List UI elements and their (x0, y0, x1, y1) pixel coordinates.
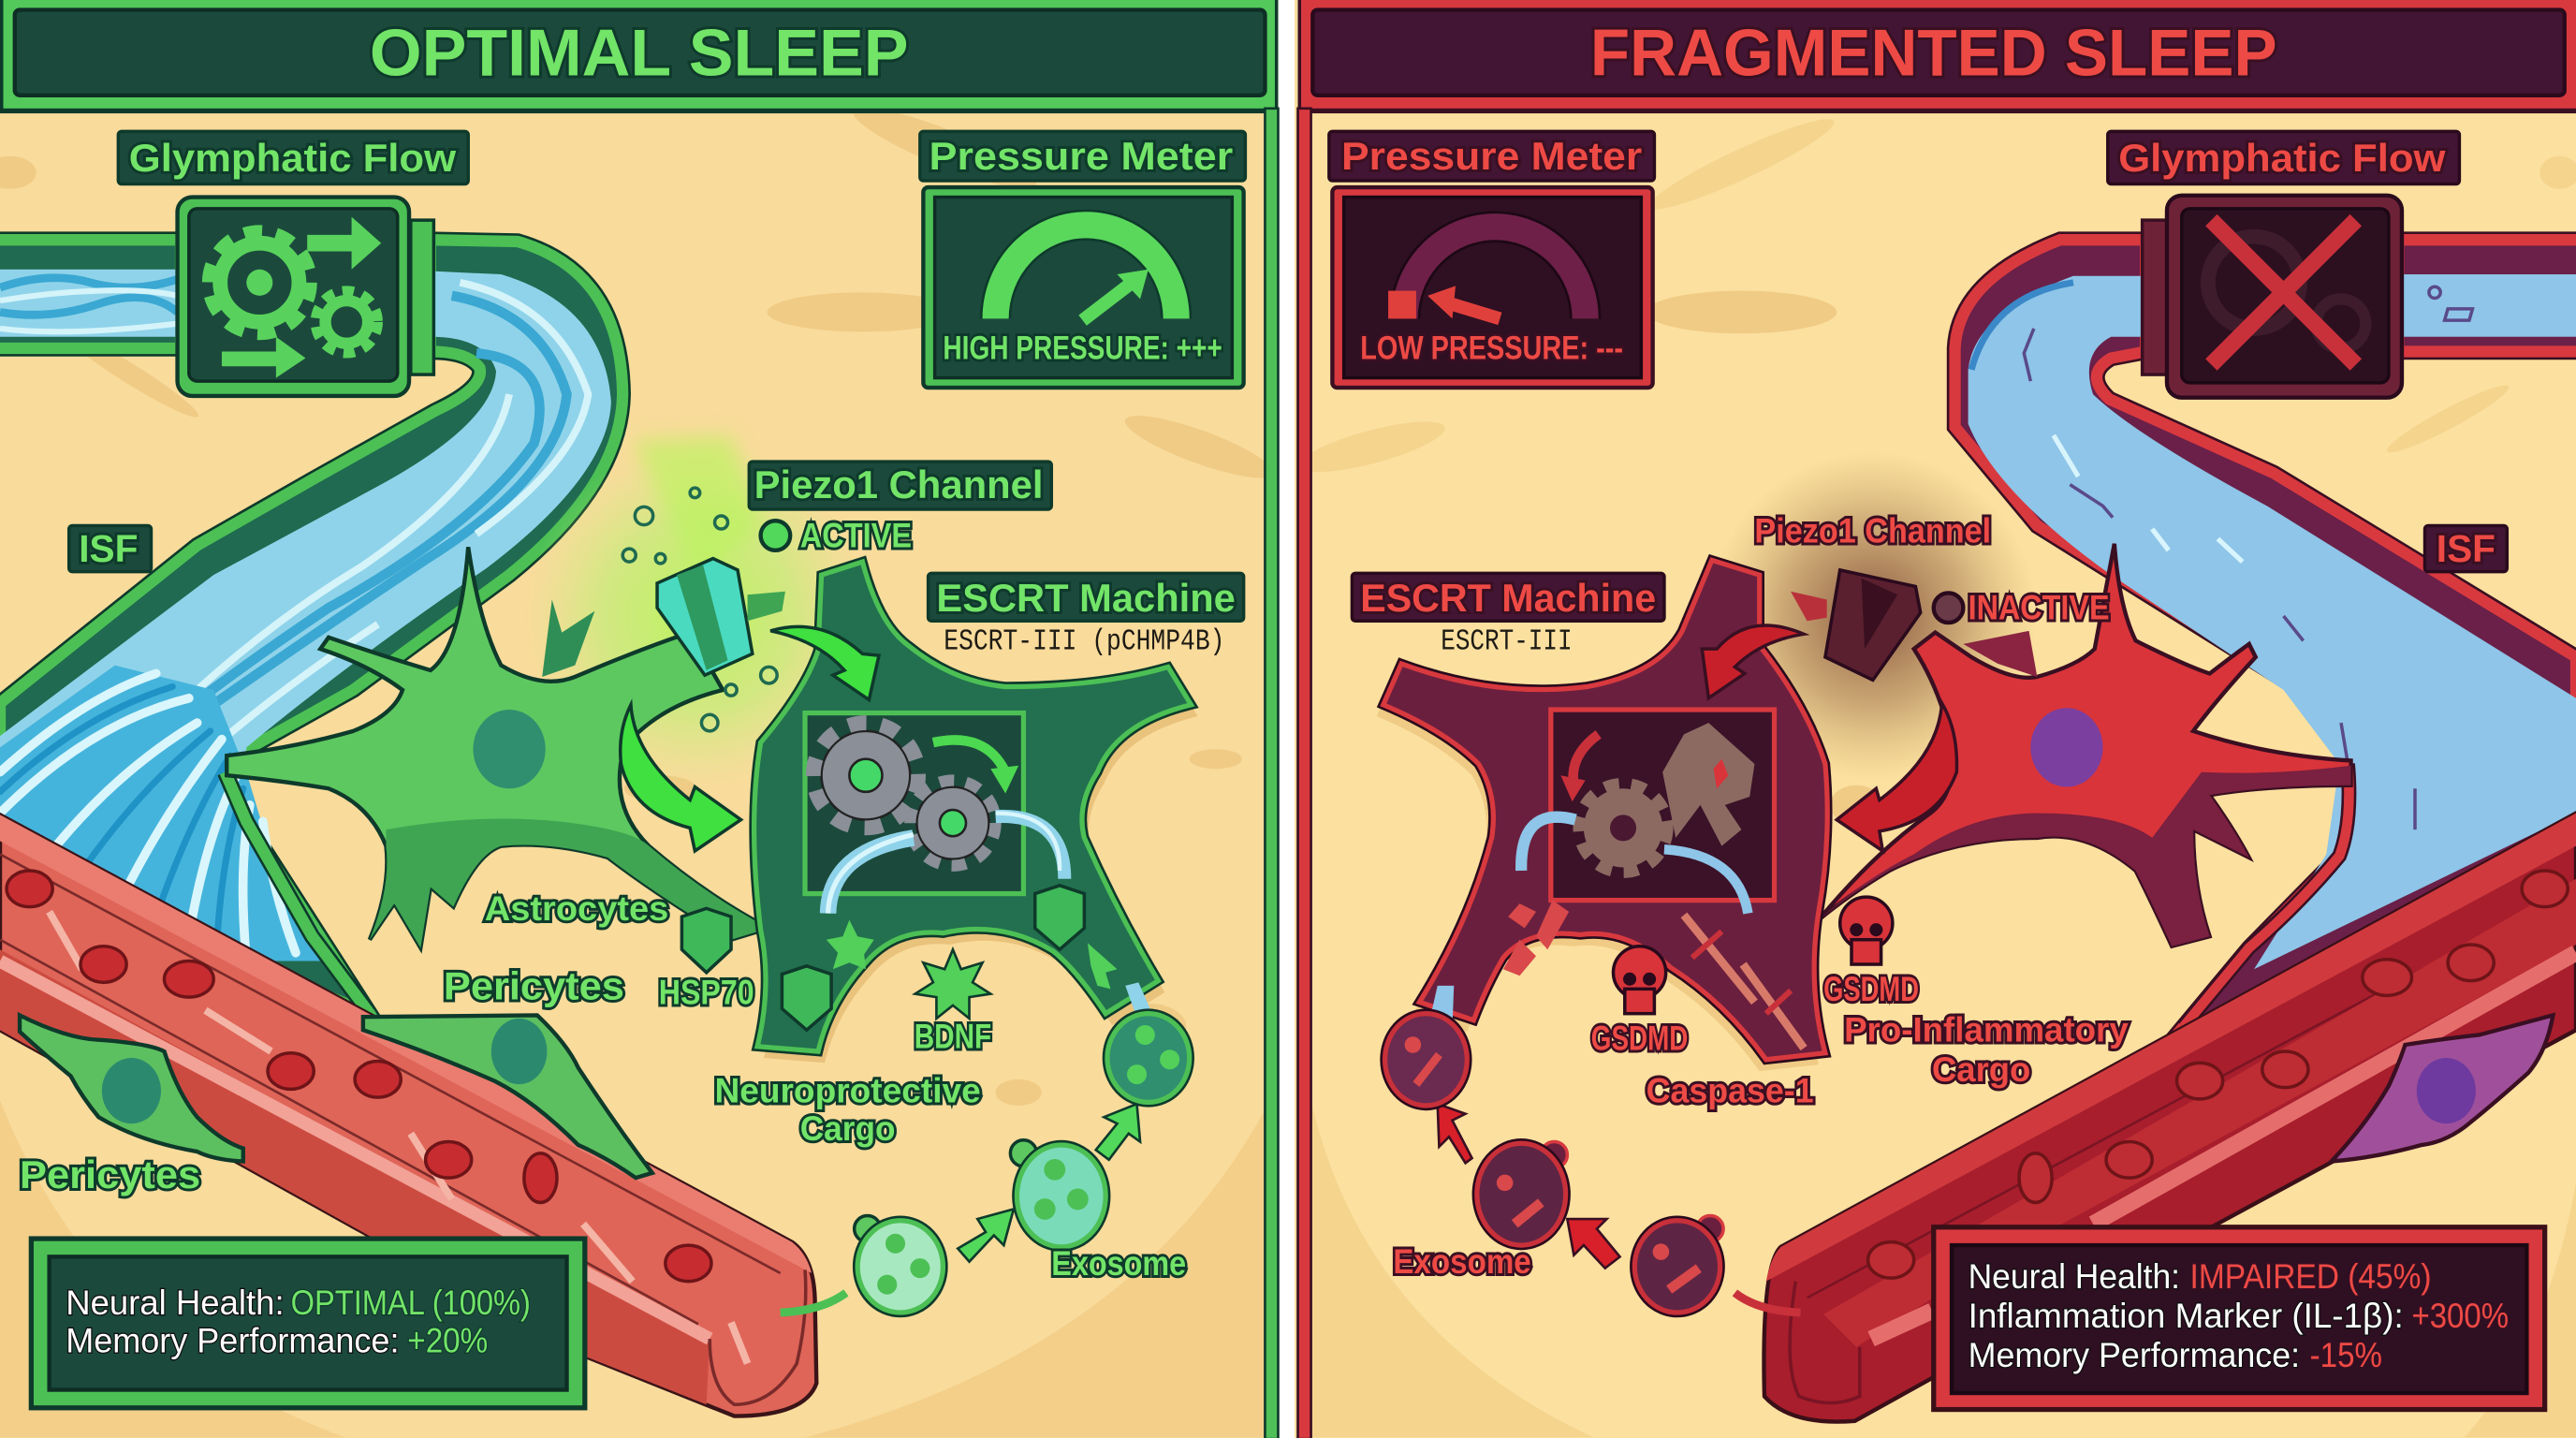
ESCRT cell with gears (681, 562, 1197, 1063)
label: glymphatic flow: Glymphatic Flow (2118, 136, 2446, 180)
label: neuroprotective cargo: Neuroprotective (714, 1072, 981, 1110)
label: BDNF: BDNF (915, 1018, 991, 1056)
stats box: optimal: Neural Health: (66, 1284, 285, 1322)
ESCRT cell with broken gears (1377, 560, 1827, 1071)
label: ISF (2425, 526, 2507, 572)
stats box: fragmented: +300% (2411, 1297, 2509, 1335)
arrow (958, 1209, 1014, 1262)
label: pericytes lower: Pericytes (20, 1152, 200, 1196)
label: GSDMD left: GSDMD (1591, 1019, 1688, 1057)
status: active: ACTIVE (800, 517, 912, 555)
stats box: fragmented: Memory Performance: (1969, 1336, 2300, 1374)
text: ESCRT-III: ESCRT-III (1441, 626, 1573, 659)
curved arrow: piezo to ESCRT (770, 626, 879, 700)
status: inactive: INACTIVE (1969, 589, 2110, 627)
label: GSDMD right: GSDMD (1823, 970, 1919, 1008)
label: caspase-1: Caspase-1 (1647, 1072, 1814, 1110)
red blood cells (1868, 871, 2568, 1278)
header: fragmented sleep (1298, 0, 2576, 113)
exosome 3 (1107, 982, 1190, 1102)
panel: optimal sleep (0, 0, 1279, 1438)
arrow (1438, 1104, 1472, 1163)
pressure gauge: low: LOW PRESSURE: --- (1360, 330, 1623, 366)
label: piezo1 channel: Piezo1 Channel (1754, 511, 1991, 550)
curved arrow: astrocyte to ESCRT (1837, 703, 1956, 851)
stats box: optimal: OPTIMAL (100%) (291, 1284, 531, 1322)
stats box: fragmented: -15% (2310, 1336, 2382, 1374)
stats box: fragmented: Inflammation Marker (IL-1β): (1969, 1297, 2404, 1335)
pericyte: upper (363, 1015, 652, 1178)
header: fragmented sleep: FRAGMENTED SLEEP (1590, 16, 2277, 90)
panel background (1295, 0, 2576, 1438)
gear window (805, 713, 1023, 894)
astrocyte (227, 547, 768, 947)
exosome connector (781, 1293, 846, 1313)
leaking water (1521, 817, 1748, 914)
stats box: fragmented (1934, 1227, 2545, 1410)
label: glymphatic flow: Glymphatic Flow (129, 136, 456, 180)
piezo glow (526, 435, 871, 788)
label: astrocytes: Astrocytes (485, 889, 668, 928)
red blood cells (7, 871, 711, 1282)
broken gear window (1551, 710, 1775, 901)
label: neuroprotective cargo (714, 1072, 981, 1148)
blood vessel with red cells (0, 814, 816, 1416)
curved arrow: astrocyte to ESCRT (621, 705, 741, 851)
label: pro-inflammatory cargo: Pro-Inflammatory (1844, 1011, 2129, 1049)
exosome 1 (855, 1215, 943, 1313)
exosome chain (855, 982, 1190, 1313)
label: exosome: Exosome (1051, 1244, 1186, 1283)
stats box: fragmented: Neural Health: (1969, 1257, 2180, 1296)
label: ISF (69, 526, 151, 572)
arrow (1096, 1104, 1140, 1160)
piezo1 channel: active (622, 488, 785, 731)
label: ESCRT machine: ESCRT Machine (936, 576, 1236, 620)
exosome chain (1385, 986, 1723, 1313)
blood vessel with red cells (1764, 814, 2576, 1422)
label: pericytes upper: Pericytes (444, 963, 624, 1007)
neuroprotective cargo icons (681, 886, 1117, 1030)
water through gears (828, 814, 1064, 914)
header: optimal sleep: OPTIMAL SLEEP (370, 16, 909, 90)
dark glow around inactive piezo (1708, 452, 2037, 780)
label: ISF: ISF (79, 527, 138, 570)
exosome 2 (1477, 1142, 1567, 1245)
pressure gauge: high: HIGH PRESSURE: +++ (943, 330, 1222, 366)
glymphatic flow gearbox icon (178, 198, 433, 396)
caspase swords and debris (1503, 901, 1804, 1049)
pericyte: lower (20, 1015, 243, 1162)
label: pressure meter: Pressure Meter (1341, 134, 1642, 178)
pressure gauge: low (1332, 187, 1653, 388)
arrow (1567, 1219, 1620, 1269)
pressure gauge: high (923, 187, 1244, 388)
panel border (1265, 109, 1278, 1438)
stats box: optimal (31, 1239, 585, 1408)
panel background (0, 0, 1279, 1438)
skull: GSDMD right (1840, 897, 1893, 964)
glymphatic pipe with ISF water (1955, 240, 2576, 1027)
exosome 2 (1010, 1140, 1105, 1247)
label: piezo1 channel: Piezo1 Channel (754, 462, 1043, 506)
astrocyte (1819, 544, 2351, 946)
label: ISF: ISF (2437, 527, 2496, 570)
centre divider (1275, 0, 1298, 1438)
status: active (761, 517, 912, 555)
glymphatic pipe with ISF water (0, 240, 622, 1014)
panel: fragmented sleep (1295, 0, 2576, 1438)
label: ESCRT machine: ESCRT Machine (1360, 576, 1656, 620)
piezo1 channel: inactive (1791, 570, 1921, 680)
stats box: optimal: Memory Performance: (66, 1321, 399, 1359)
label: exosome: Exosome (1393, 1242, 1531, 1281)
text: ESCRT-III: ESCRT-III (pCHMP4B) (944, 626, 1224, 659)
label: pressure meter: Pressure Meter (929, 134, 1233, 178)
pericyte: purple (2331, 1015, 2553, 1162)
exosome 1 (1634, 1215, 1723, 1313)
stats box: optimal: +20% (407, 1321, 488, 1359)
label: neuroprotective cargo: Cargo (800, 1109, 896, 1148)
label: pro-inflammatory cargo: Cargo (1932, 1050, 2030, 1089)
panel border (1298, 109, 1311, 1438)
stats box: fragmented: IMPAIRED (45%) (2190, 1257, 2432, 1296)
skull: GSDMD left (1614, 946, 1666, 1014)
header: optimal sleep (0, 0, 1278, 113)
curved arrow: piezo to ESCRT (1702, 625, 1804, 698)
glymphatic flow blocked icon (2143, 196, 2402, 398)
label: pro-inflammatory cargo (1844, 1011, 2129, 1089)
label: HSP70: HSP70 (659, 973, 754, 1011)
exosome 3 (1385, 986, 1467, 1106)
exosome connector (1734, 1293, 1801, 1313)
